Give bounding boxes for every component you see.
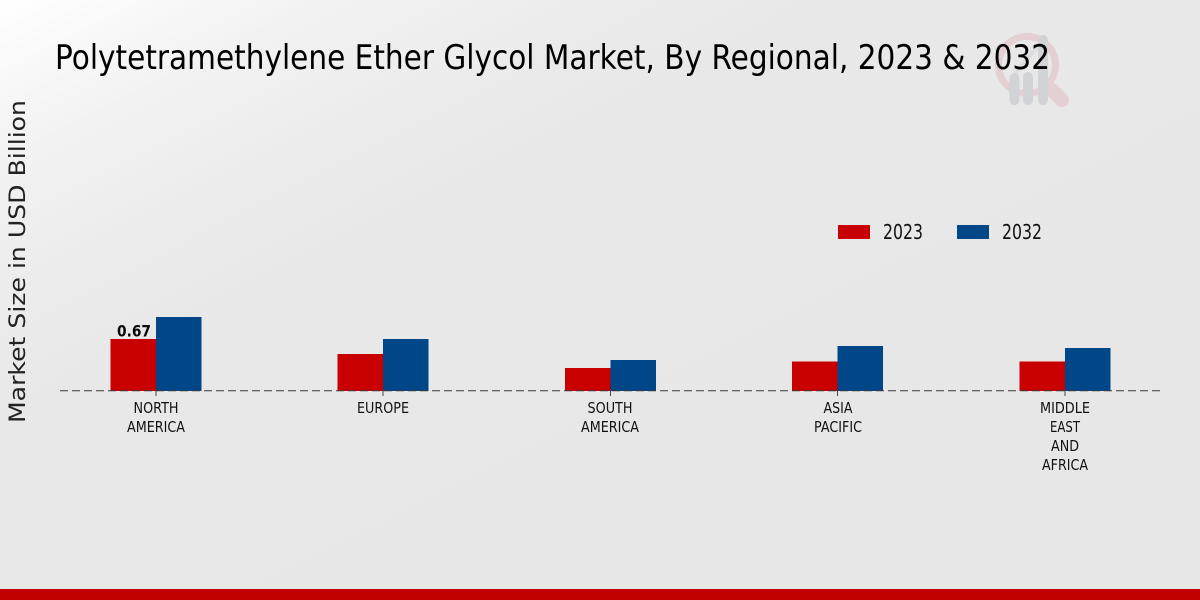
group: North America <box>110 317 202 436</box>
group: Middle East and Africa: EAST <box>1050 418 1080 436</box>
icon: watermark magnifier with bars <box>998 36 1062 100</box>
legend <box>838 220 1042 244</box>
bar chart <box>60 317 1160 474</box>
group: Middle East and Africa: MIDDLE <box>1040 399 1090 417</box>
group: North America: AMERICA <box>127 418 185 436</box>
legend item: 2032 <box>957 220 1042 244</box>
legend item: 2023 <box>838 220 923 244</box>
y-axis label: Market Size in USD Billion <box>5 100 31 423</box>
group: South America <box>565 360 656 436</box>
group: Middle East and Africa: AFRICA <box>1042 456 1088 474</box>
group: South America: AMERICA <box>581 418 639 436</box>
group: Middle East and Africa <box>1020 348 1110 474</box>
group: Asia Pacific: PACIFIC <box>814 418 862 436</box>
footer bar <box>0 589 1200 600</box>
group: Asia Pacific: ASIA <box>824 399 853 417</box>
group: Middle East and Africa: AND <box>1051 437 1079 455</box>
group: South America: SOUTH <box>588 399 632 417</box>
group: Asia Pacific <box>792 346 883 436</box>
group: North America: 0.67 <box>117 322 151 340</box>
group: Europe: EUROPE <box>357 399 409 417</box>
legend item: 2023: 2023 <box>883 220 923 244</box>
title: Polytetramethylene Ether Glycol Market, By Regional, 2023 & 2032 <box>55 38 1050 78</box>
group: North America: NORTH <box>134 399 178 417</box>
legend item: 2032: 2032 <box>1002 220 1042 244</box>
group: Europe <box>338 339 428 417</box>
